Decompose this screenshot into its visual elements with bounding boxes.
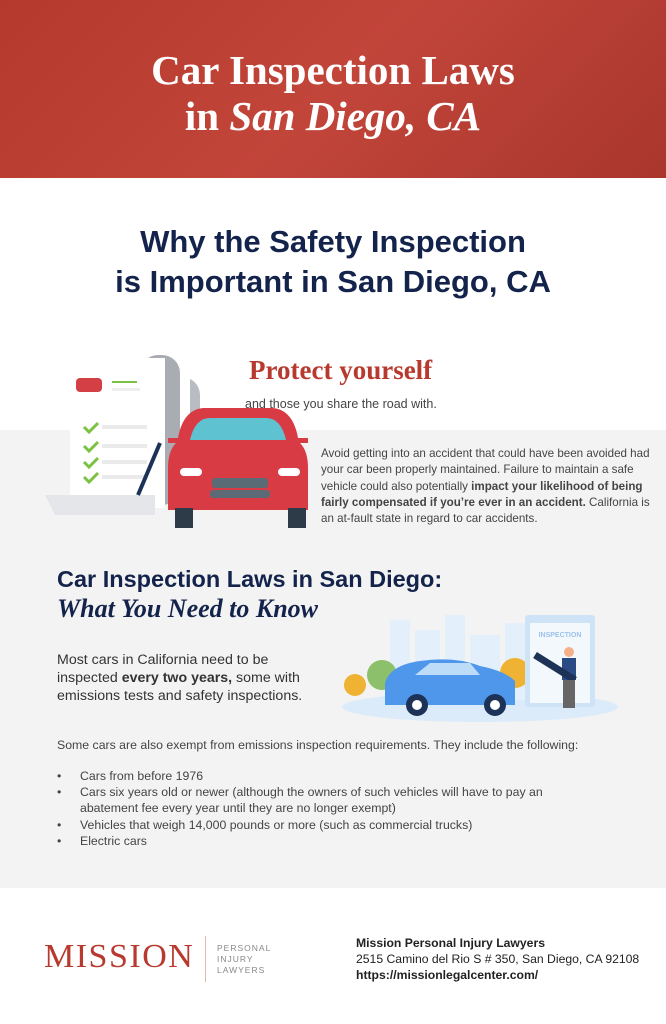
subheading text: and those you share the road with. (245, 397, 437, 411)
title: in San Diego, CA (185, 93, 481, 139)
contact info: https://missionlegalcenter.com/ (356, 968, 538, 982)
exemption list: • (57, 769, 61, 783)
logo: INJURY (217, 954, 254, 964)
section heading: Why the Safety Inspection (140, 224, 526, 259)
contact info: Mission Personal Injury Lawyers (356, 936, 545, 950)
section heading 2 (57, 566, 442, 623)
exemption list: • (57, 818, 61, 832)
logo: MISSION (44, 938, 194, 975)
illustration: checklist and red car (45, 355, 308, 528)
gray background band (0, 430, 666, 888)
protect yourself heading: Protect yourself (249, 355, 432, 385)
exemption list: Cars six years old or newer (although the owners of such vehicles will have to pay an abatement fee every year until they are no longer exempt) (80, 785, 543, 815)
exemption list: Vehicles that weigh 14,000 pounds or more (such as commercial trucks) (80, 818, 472, 832)
illustration: inspection scene (342, 615, 618, 722)
logo: LAWYERS (217, 965, 265, 975)
body text: protect: Avoid getting into an accident that could have been avoided had your car been properly maintained. Failure to maintain a safe vehicle could also potentially impact your likelihood of being fairly compensated if you’re ever in an accident. California is an at-fault state in regard to car accidents. (321, 447, 650, 525)
exemption list: • (57, 785, 61, 799)
section heading (115, 224, 551, 299)
exemption list: Electric cars (80, 834, 147, 848)
contact info (356, 936, 639, 982)
logo (44, 936, 271, 982)
title (151, 47, 515, 139)
exemption list: • (57, 834, 61, 848)
section heading: is Important in San Diego, CA (115, 264, 551, 299)
contact info: 2515 Camino del Rio S # 350, San Diego, CA 92108 (356, 952, 639, 966)
exemption list: Cars from before 1976 (80, 769, 203, 783)
header banner (0, 0, 666, 178)
section heading 2: Car Inspection Laws in San Diego: (57, 566, 442, 592)
logo: PERSONAL (217, 943, 271, 953)
exemption list (57, 769, 543, 848)
illustration: inspection scene: INSPECTION (539, 632, 581, 639)
section heading 2: What You Need to Know (57, 594, 318, 623)
title: Car Inspection Laws (151, 47, 515, 93)
intro text: Most cars in California need to be inspected every two years, some with emissions tests and safety inspections. (57, 652, 302, 704)
exemption intro: Some cars are also exempt from emissions inspection requirements. They include the following: (57, 738, 578, 752)
